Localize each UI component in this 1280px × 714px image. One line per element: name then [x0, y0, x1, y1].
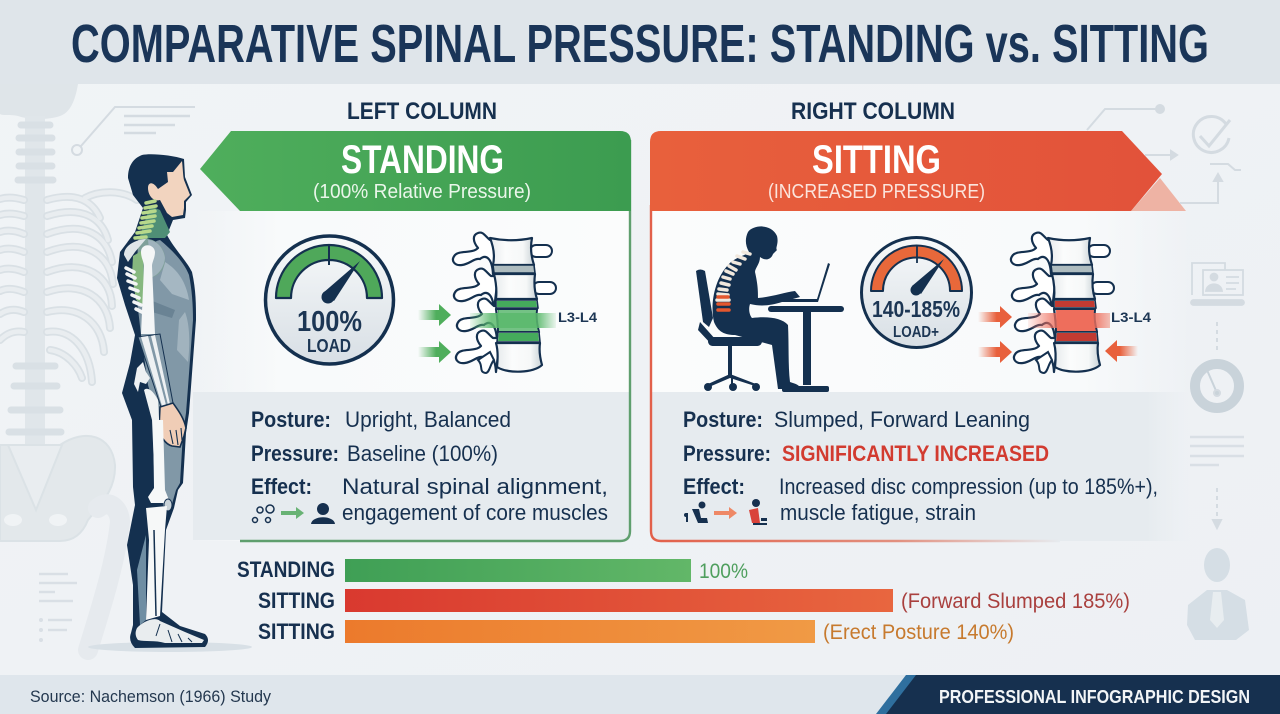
- header pale tail: [1131, 178, 1186, 211]
- bar: sitting erect: (Erect Posture 140%): [823, 621, 1014, 644]
- posture row: Posture:: [683, 407, 763, 432]
- figure silhouette: [117, 154, 208, 648]
- background skeleton: [0, 84, 137, 650]
- gauge: 140-185% load: [862, 238, 972, 348]
- arrow: red lower: [978, 341, 1012, 363]
- gauge: 140-185% load: LOAD+: [893, 324, 939, 341]
- icon: business person: [1187, 548, 1249, 640]
- posture row: Upright, Balanced: [345, 407, 511, 432]
- text lines: [1190, 437, 1244, 465]
- effect row: Increased disc compression (up to 185%+),: [779, 474, 1158, 499]
- bar: sitting erect: SITTING: [258, 619, 335, 644]
- pressure row: Pressure:: [251, 441, 339, 466]
- chair: [696, 270, 762, 391]
- hip white band: [144, 389, 163, 490]
- connector top: [1087, 105, 1222, 203]
- pressure row: Pressure:: [683, 441, 771, 466]
- spine diagram: standing: [453, 233, 556, 373]
- gauge: 100% load: LOAD: [307, 336, 351, 356]
- connector dashed: [1216, 322, 1218, 352]
- foot bones: [136, 619, 204, 643]
- shoulder blade: [124, 239, 146, 262]
- gauge: 140-185% load: 140-185%: [872, 296, 960, 322]
- femur: [148, 420, 169, 503]
- effect row: Effect:: [683, 474, 745, 499]
- icon: seated person at desk: [696, 226, 844, 392]
- arrow: red from right: [1105, 340, 1138, 362]
- pelvis fragment: [134, 362, 150, 392]
- decoration: lower left notes: [39, 574, 77, 642]
- bar chart: [237, 557, 1130, 644]
- deltoid: [137, 239, 165, 278]
- icon: profile card: [1191, 263, 1244, 305]
- decoration: upper left callout: [72, 107, 195, 155]
- forearm: [138, 334, 173, 407]
- neck muscle: [138, 206, 170, 242]
- sitting header: [650, 131, 1162, 211]
- info block background: [193, 392, 629, 540]
- person: [713, 226, 800, 389]
- hand: [159, 403, 186, 447]
- effect row: engagement of core muscles: [342, 500, 608, 525]
- posture row: [251, 407, 511, 432]
- panel border: [651, 205, 1060, 541]
- bar: sitting forward slumped: [258, 588, 1130, 613]
- body muscle front: [137, 240, 193, 506]
- arrow: green upper: [418, 304, 451, 326]
- column label: right: RIGHT COLUMN: [791, 98, 955, 125]
- pressure row: [251, 441, 498, 466]
- panel border: [240, 140, 630, 541]
- credit: PROFESSIONAL INFOGRAPHIC DESIGN: [939, 687, 1250, 707]
- arrow: red upper: [978, 306, 1012, 328]
- decoration: right icons: [1087, 105, 1249, 640]
- icon: sitting to strain: [684, 499, 767, 525]
- standing header: STANDING: [341, 138, 504, 182]
- info block background: [651, 392, 1190, 541]
- upper back vertebrae: [126, 268, 142, 312]
- icon: muscles to person: [252, 503, 335, 524]
- green back area: [132, 250, 144, 305]
- bar: sitting forward slumped: (Forward Slumped 185%): [901, 590, 1130, 613]
- bar: standing: 100%: [699, 560, 748, 583]
- source: Source: Nachemson (1966) Study: [30, 687, 271, 706]
- spine diagram: sitting: [1011, 233, 1114, 373]
- bar: sitting forward slumped: SITTING: [258, 588, 335, 613]
- sitting header: (INCREASED PRESSURE): [768, 181, 985, 203]
- bar: sitting erect: [258, 619, 1014, 644]
- patella: [164, 499, 172, 511]
- pressure row: SIGNIFICANTLY INCREASED: [782, 441, 1049, 466]
- effect row: Effect:: [251, 474, 312, 499]
- posture row: Posture:: [251, 407, 331, 432]
- bar: standing: [237, 557, 748, 583]
- effect row: Natural spinal alignment,: [342, 474, 608, 499]
- gauge: 100% load: [266, 236, 394, 364]
- humerus: [141, 245, 155, 334]
- panel body: [650, 211, 1190, 541]
- hand fingers: [170, 428, 182, 445]
- effect row: [251, 474, 608, 525]
- sitting header: SITTING: [812, 138, 941, 182]
- column label: left: LEFT COLUMN: [347, 98, 497, 125]
- standing header: [200, 131, 631, 211]
- connector arrow: [1213, 488, 1221, 528]
- panel body: [193, 211, 630, 541]
- icon: check: [1193, 116, 1241, 170]
- tibia: [146, 506, 167, 620]
- pressure row: [683, 441, 1049, 466]
- panel: sitting: [650, 131, 1190, 541]
- panel: standing: [193, 131, 631, 541]
- chest shading: [160, 262, 189, 300]
- ground shadow: [88, 642, 252, 652]
- desk: [768, 306, 844, 392]
- effect row: muscle fatigue, strain: [780, 500, 976, 525]
- title band: [0, 0, 1280, 84]
- calf shading: [137, 535, 146, 625]
- standing header: (100% Relative Pressure): [313, 181, 531, 203]
- standing figure with skeleton: [88, 154, 252, 652]
- pressure row: Baseline (100%): [347, 441, 498, 466]
- effect row: [683, 474, 1158, 525]
- footer: [0, 675, 1280, 714]
- icon: donut gauge: [1195, 364, 1239, 408]
- posture row: Slumped, Forward Leaning: [774, 407, 1030, 432]
- label: L3-L4: L3-L4: [1111, 309, 1151, 325]
- face and ear: [148, 161, 190, 217]
- green cervical spine: [135, 201, 156, 238]
- label: L3-L4: L3-L4: [558, 309, 597, 325]
- gauge: 100% load: 100%: [297, 306, 362, 338]
- arrow: green lower: [418, 341, 451, 363]
- bar: standing: STANDING: [237, 557, 335, 582]
- laptop: [780, 263, 830, 302]
- spine highlights: [717, 252, 750, 310]
